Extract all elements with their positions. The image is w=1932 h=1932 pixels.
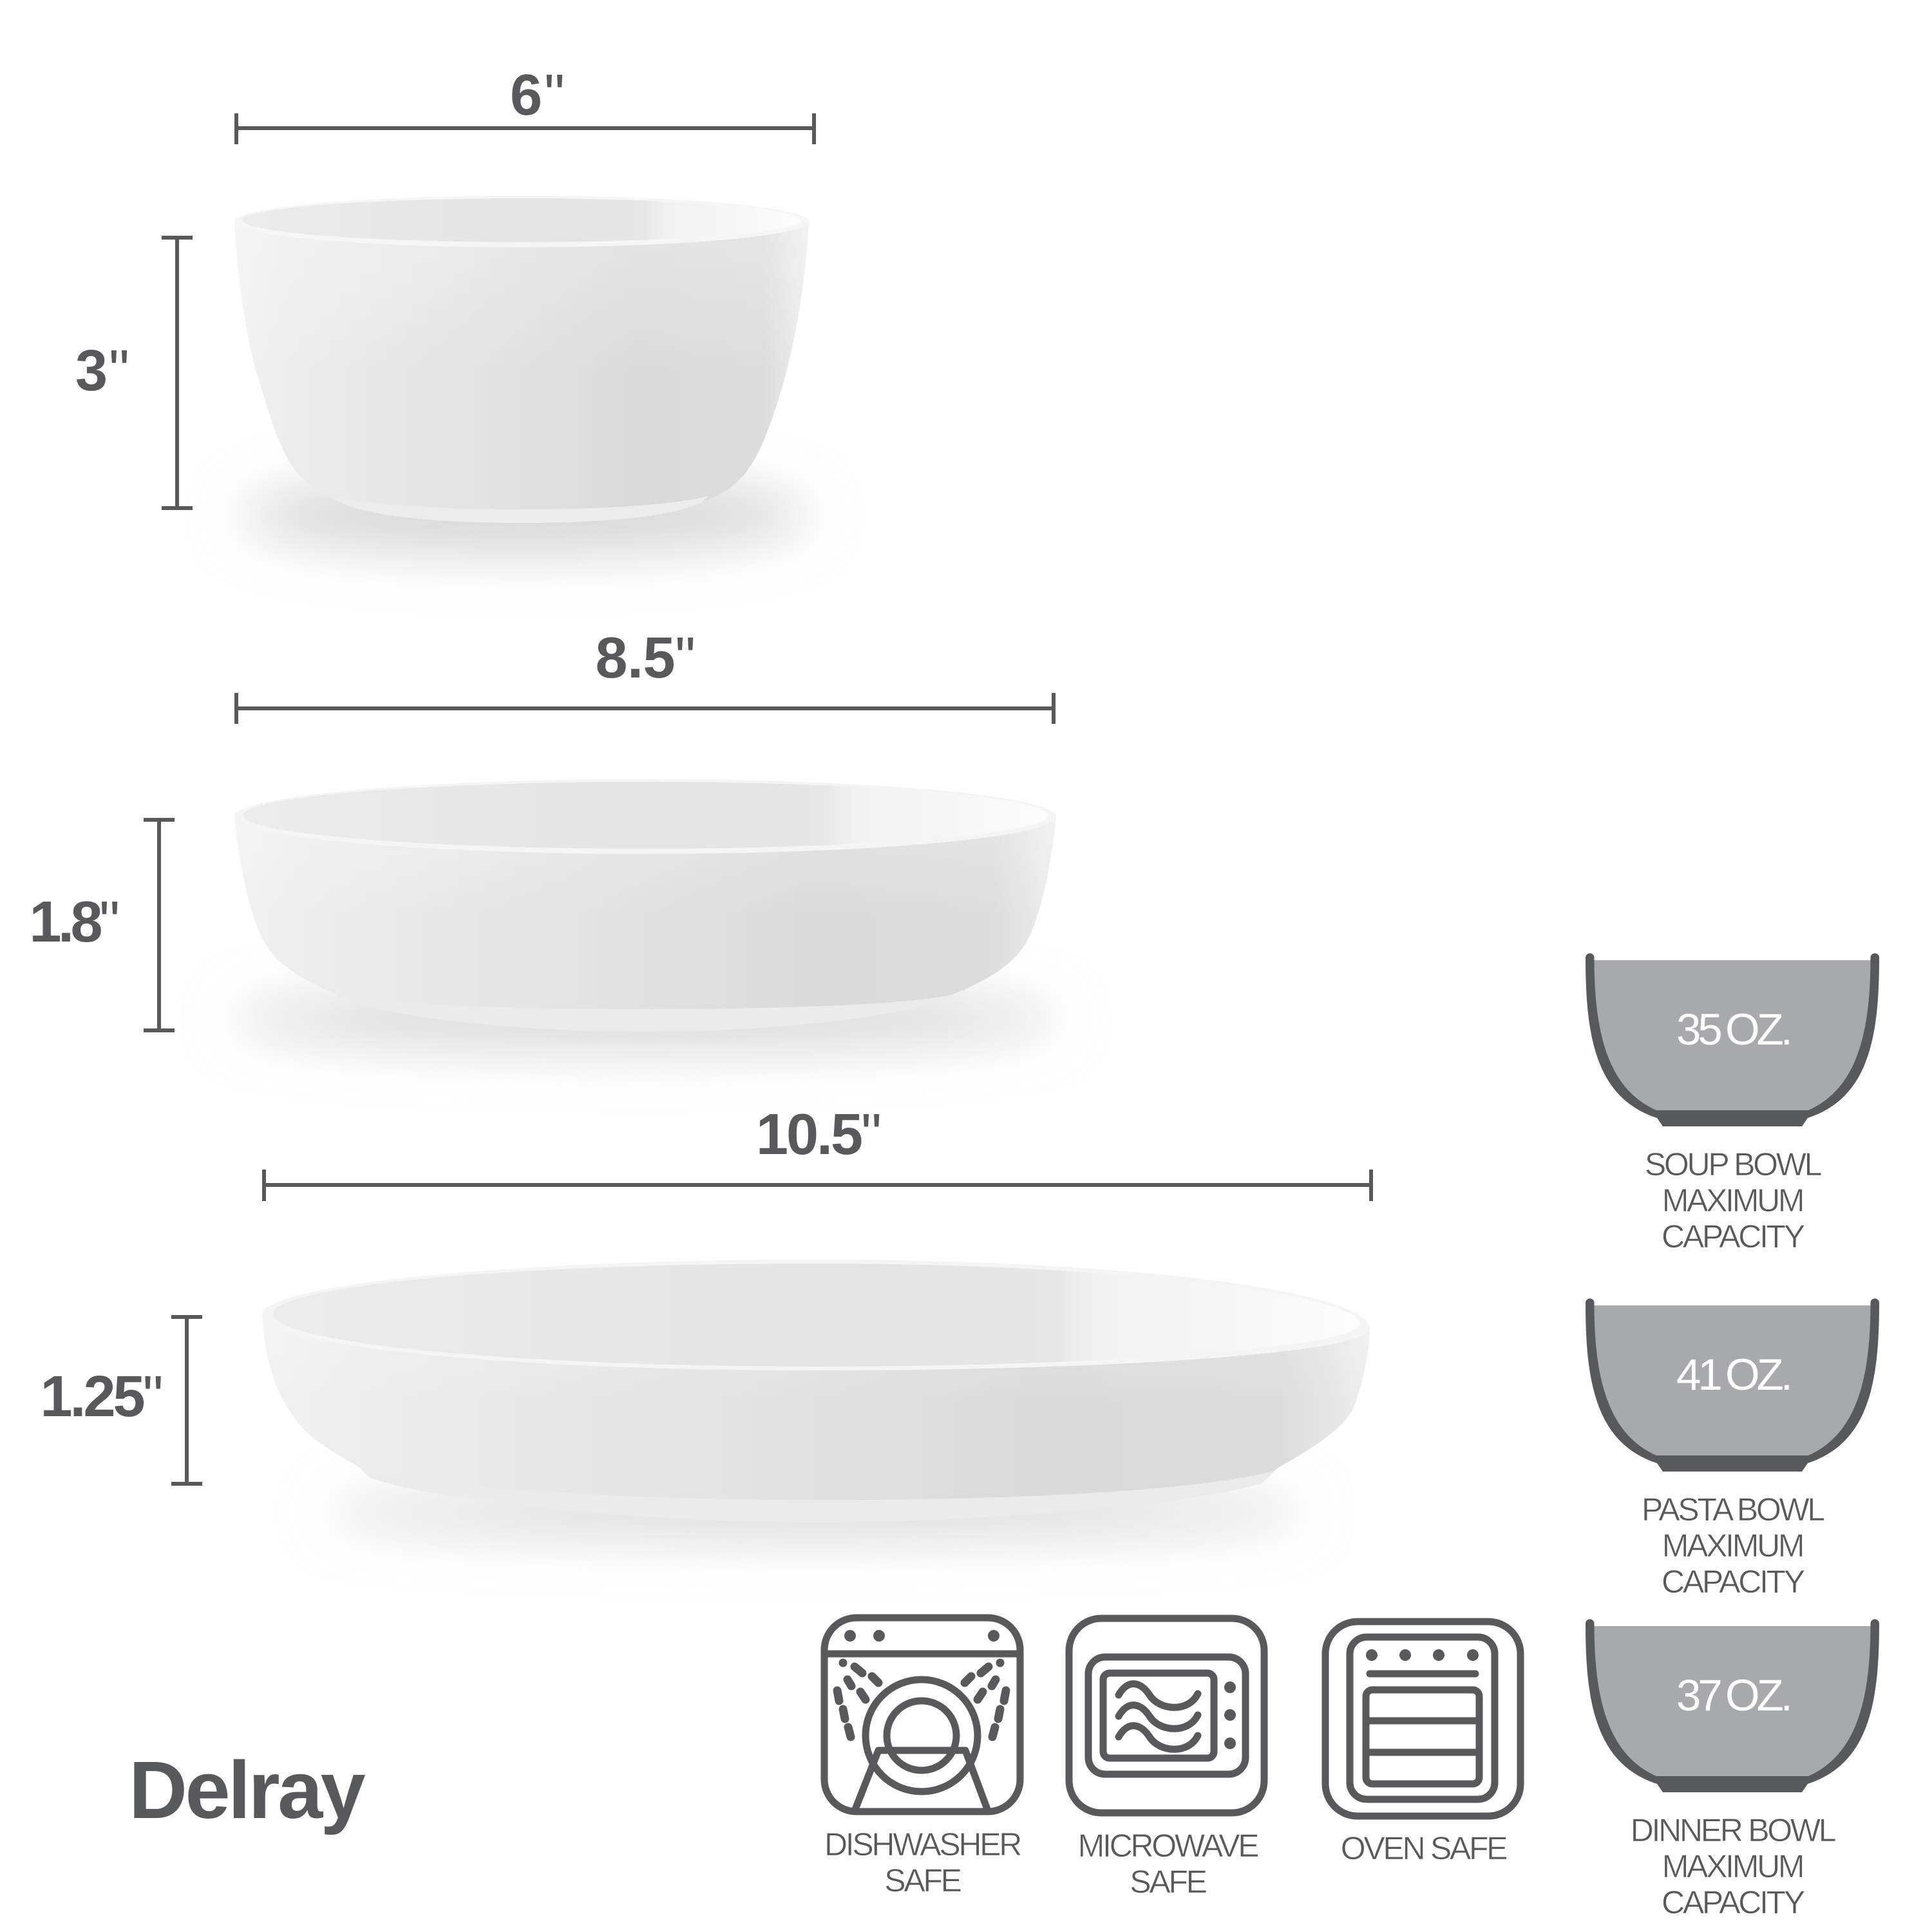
dimension: pasta bowl width: 8.5" bbox=[595, 626, 696, 690]
soup bowl interior bbox=[242, 198, 801, 242]
capacity: soup bowl: SOUP BOWL bbox=[1645, 1146, 1822, 1182]
pasta bowl interior bbox=[243, 782, 1048, 849]
icon: microwave safe bbox=[1069, 1618, 1264, 1813]
dinner bowl shadow bbox=[327, 1485, 1305, 1539]
capacity: dinner bowl: CAPACITY bbox=[1662, 1884, 1805, 1920]
dimension: dinner bowl width: 10.5" bbox=[756, 1103, 880, 1167]
soup bowl capacity fill bbox=[1594, 960, 1871, 1114]
capacity: soup bowl: 35 OZ. bbox=[1676, 1005, 1790, 1054]
capacity: dinner bowl: DINNER BOWL bbox=[1631, 1812, 1836, 1848]
label: microwave safe: SAFE bbox=[1130, 1864, 1207, 1900]
soup bowl product bbox=[234, 196, 809, 555]
pasta bowl capacity fill bbox=[1594, 1305, 1871, 1459]
pasta bowl shadow bbox=[233, 985, 1057, 1052]
soup bowl wall highlight bbox=[234, 196, 809, 523]
capacity: soup bowl: CAPACITY bbox=[1662, 1218, 1805, 1255]
icon: dishwasher safe bbox=[824, 1618, 1020, 1812]
label: dishwasher safe bbox=[824, 1826, 1021, 1899]
soup bowl rim bbox=[234, 196, 809, 247]
dinner bowl rim bbox=[262, 1260, 1370, 1370]
dimension: dinner bowl height: 1.25" bbox=[40, 1365, 162, 1429]
capacity: pasta bowl: 41 OZ. bbox=[1676, 1350, 1790, 1399]
pasta bowl outer wall bbox=[234, 779, 1056, 1032]
dinner bowl wall highlight bbox=[262, 1260, 1370, 1522]
pasta bowl foot bbox=[336, 994, 954, 1032]
dimension: soup bowl height: 3" bbox=[75, 339, 131, 403]
soup bowl outer wall bbox=[234, 196, 809, 523]
label: microwave safe bbox=[1078, 1828, 1258, 1900]
dinner bowl capacity fill bbox=[1594, 1626, 1871, 1780]
capacity: pasta bowl: PASTA BOWL bbox=[1642, 1492, 1824, 1528]
dimension: pasta bowl height bbox=[29, 820, 175, 1030]
label: dishwasher safe: DISHWASHER bbox=[824, 1826, 1021, 1862]
dinner bowl interior bbox=[273, 1264, 1360, 1367]
capacity: pasta bowl bbox=[1586, 1298, 1879, 1600]
pasta bowl wall highlight bbox=[234, 779, 1056, 1032]
capacity: dinner bowl: MAXIMUM bbox=[1662, 1848, 1803, 1884]
icon: oven safe bbox=[1325, 1622, 1520, 1816]
dimension: dinner bowl width bbox=[264, 1103, 1371, 1201]
dimension: soup bowl height bbox=[75, 238, 193, 508]
soup bowl outline bbox=[1586, 953, 1879, 1126]
capacity: dinner bowl bbox=[1586, 1619, 1879, 1920]
capacity: pasta bowl: CAPACITY bbox=[1662, 1564, 1805, 1600]
dinner bowl outline bbox=[1586, 1619, 1879, 1792]
pasta bowl outline bbox=[1586, 1298, 1879, 1472]
label: oven safe: OVEN SAFE bbox=[1341, 1830, 1507, 1866]
capacity: soup bowl: MAXIMUM bbox=[1662, 1182, 1803, 1218]
capacity: soup bowl bbox=[1586, 953, 1879, 1255]
brand name: Delray bbox=[129, 1745, 366, 1835]
dimension: pasta bowl width bbox=[236, 626, 1054, 724]
pasta bowl product bbox=[233, 779, 1057, 1052]
dimension: pasta bowl height: 1.8" bbox=[29, 890, 118, 954]
label: dishwasher safe: SAFE bbox=[884, 1862, 961, 1899]
dinner bowl foot bbox=[361, 1468, 1274, 1522]
soup bowl shadow bbox=[242, 475, 808, 555]
dimension: soup bowl width bbox=[236, 63, 814, 144]
label: microwave safe: MICROWAVE bbox=[1078, 1828, 1258, 1864]
dimension: soup bowl width: 6" bbox=[510, 63, 567, 128]
dinner bowl outer wall bbox=[262, 1260, 1370, 1522]
capacity: pasta bowl: MAXIMUM bbox=[1662, 1528, 1803, 1564]
pasta bowl rim bbox=[234, 779, 1056, 854]
capacity: dinner bowl: 37 OZ. bbox=[1676, 1671, 1790, 1720]
dinner bowl product bbox=[262, 1260, 1370, 1539]
soup bowl foot bbox=[332, 496, 708, 523]
dimension: dinner bowl height bbox=[40, 1317, 202, 1484]
